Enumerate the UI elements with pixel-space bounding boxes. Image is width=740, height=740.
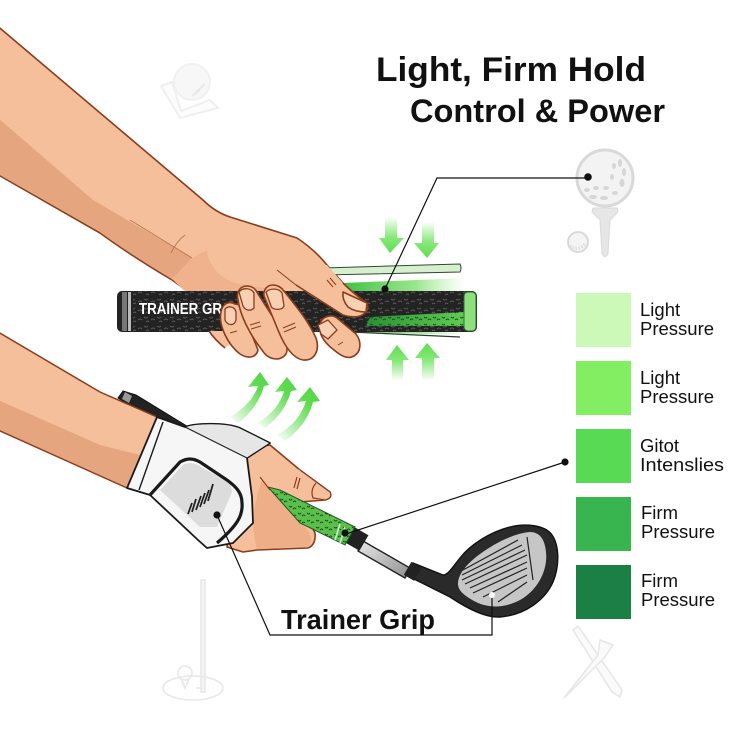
shaft and club head — [346, 525, 558, 617]
fingernails — [225, 307, 236, 325]
legend: pressure intensity swatches: Light — [640, 299, 680, 320]
legend: pressure intensity swatches: Pressure — [641, 521, 715, 542]
glove — [127, 417, 270, 548]
grip label text: TRAINER GR — [139, 301, 222, 318]
title: Control & Power — [410, 93, 665, 129]
title — [376, 51, 665, 129]
legend: pressure intensity swatches: Firm — [641, 570, 678, 591]
legend: pressure intensity swatches: Gitot — [640, 435, 679, 456]
icon: faint flag pin on green — [163, 580, 223, 700]
arrows: curved upward motion — [230, 372, 320, 441]
legend: pressure intensity swatches: Pressure — [641, 589, 715, 610]
icon: golf ball on tee — [568, 150, 633, 256]
club face grooves — [462, 537, 533, 602]
upper grip labelled Trainer Grip — [117, 291, 477, 332]
upper hand: fingers and thumb — [209, 262, 368, 360]
club face — [458, 532, 546, 606]
icon: faint golf ball on scorecard — [161, 64, 218, 118]
arrows: downward pressure — [379, 217, 439, 258]
trainer grip label: Trainer Grip — [281, 604, 435, 635]
legend: pressure intensity swatches: Light — [640, 367, 680, 388]
lower club grip end behind glove — [118, 391, 190, 432]
legend: pressure intensity swatches: Pressure — [640, 386, 714, 407]
lower green grip — [268, 487, 355, 545]
pressure bars behind grip — [323, 264, 465, 337]
arrows: upward pressure — [386, 343, 440, 381]
legend: pressure intensity swatches — [576, 293, 724, 619]
callout lines — [214, 174, 591, 635]
icon: faint crossed tees — [564, 626, 622, 698]
legend: pressure intensity swatches: Firm — [641, 502, 678, 523]
upper hand: arm and back of hand — [0, 24, 360, 300]
lower arm — [0, 332, 157, 488]
lower hand — [227, 445, 331, 552]
legend: pressure intensity swatches: Pressure — [640, 318, 714, 339]
legend: pressure intensity swatches: Intenslies — [640, 454, 724, 475]
lower thumb — [260, 460, 331, 500]
title: Light, Firm Hold — [376, 51, 646, 89]
